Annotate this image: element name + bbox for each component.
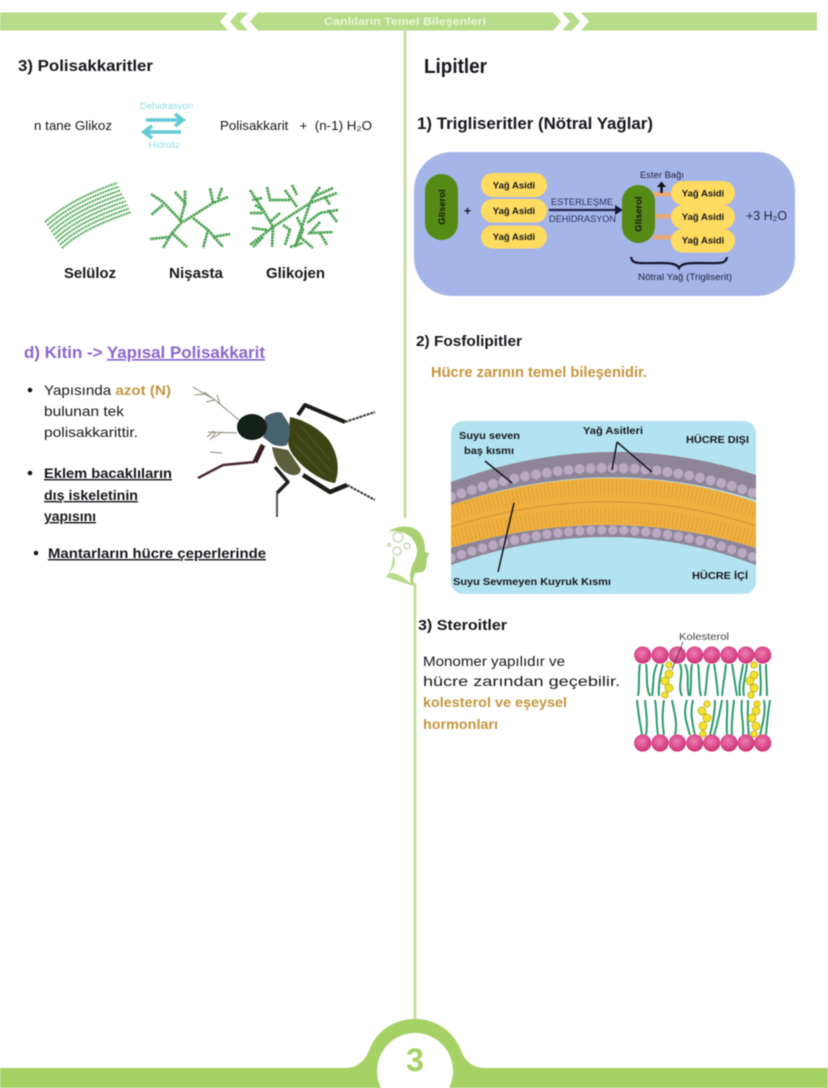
plus sign: +: [464, 204, 471, 218]
header banner: Canlıların Temel Bileşenleri: [324, 16, 486, 28]
gliserol product: Gliserol: [634, 196, 644, 232]
text block: steroitler: Monomer yapılıdır ve: [423, 653, 565, 669]
heading: lipitler: Lipitler: [424, 56, 487, 78]
diagram: nişasta: [150, 188, 230, 282]
diagram: glikojen: Glikojen: [266, 265, 325, 282]
footer bar with page number: [0, 1019, 828, 1088]
reaction: glikoz to polisakkarit: Dehidrasyon: [140, 101, 193, 111]
top phospholipid heads: [634, 646, 771, 664]
yağ asidi reactants: Yağ Asidi: [493, 180, 535, 192]
ester bond label: [640, 170, 684, 193]
membrane labels: Suyu Sevmeyen Kuyruk Kısmı: [453, 576, 611, 588]
gliserol reactant: Gliserol: [437, 189, 448, 225]
text: hücre zarı: Hücre zarının temel bileşenidir.: [431, 365, 647, 381]
membrane labels: HÜCRE DIŞI: [686, 433, 749, 446]
heading: steroitler: 3) Steroitler: [418, 617, 507, 634]
text block: kitin bullets: Mantarların hücre çeperlerinde: [48, 545, 266, 561]
text block: steroitler: [423, 653, 620, 732]
reaction: glikoz to polisakkarit: Polisakkarit + (n-1) H₂O: [220, 118, 372, 133]
diagram: selüloz: [45, 183, 131, 282]
diagram: phospholipid membrane: [451, 421, 756, 594]
ester bond label: Ester Bağı: [640, 170, 684, 180]
membrane labels: Yağ Asitleri: [583, 425, 643, 437]
icon: head silhouette: [386, 526, 429, 586]
diagram: nişasta: Nişasta: [169, 265, 224, 282]
diagram: selüloz: Selüloz: [64, 265, 116, 282]
centre divider lines: [405, 31, 415, 1022]
diagram: cholesterol bilayer: [634, 631, 771, 752]
membrane labels: [453, 425, 749, 588]
illustration: beetle: [193, 387, 375, 517]
heading: polisakkaritler: 3) Polisakkaritler: [18, 58, 153, 75]
yağ asidi products: [671, 181, 735, 252]
text block: kitin bullets: yapısını: [44, 508, 96, 524]
yağ asidi products: Yağ Asidi: [682, 236, 724, 246]
reaction arrow: ESTERLEŞME: [551, 197, 613, 208]
membrane labels: baş kısmı: [464, 445, 514, 457]
text block: kitin bullets: Eklem bacaklıların: [44, 465, 172, 481]
reaction arrow: [549, 197, 623, 225]
lipid tails: [637, 664, 770, 735]
reaction: glikoz to polisakkarit: Hidroliz: [149, 140, 181, 150]
kolesterol label: Kolesterol: [679, 631, 729, 643]
yağ asidi products: Yağ Asidi: [682, 212, 724, 223]
heading: fosfolipitler: 2) Fosfolipitler: [416, 333, 522, 350]
text block: kitin bullets: Yapısında azot (N): [44, 382, 171, 398]
heading: trigliseritler: 1) Trigliseritler (Nötral Yağlar): [417, 115, 653, 133]
text block: kitin bullets: polisakkarittir.: [44, 424, 138, 440]
header banner: [0, 12, 817, 30]
reaction: glikoz to polisakkarit: n tane Glikoz: [34, 118, 112, 133]
yağ asidi reactants: Yağ Asidi: [493, 206, 535, 217]
heading: kitin: d) Kitin -> Yapısal Polisakkarit: [24, 344, 266, 362]
text block: steroitler: kolesterol ve eşeysel: [423, 694, 567, 710]
text block: kitin bullets: bulunan tek: [44, 403, 125, 419]
bottom phospholipid heads: [634, 734, 771, 752]
membrane labels: HÜCRE İÇİ: [692, 569, 748, 582]
ester links: [653, 192, 673, 240]
brace and product label: [631, 257, 732, 282]
gliserol product: [622, 185, 655, 243]
text block: steroitler: hormonları: [423, 716, 498, 732]
gliserol reactant: [425, 174, 458, 240]
yağ asidi reactants: [481, 173, 547, 248]
reaction arrow: DEHİDRASYON: [549, 214, 616, 225]
cholesterol molecules: [661, 662, 760, 737]
reaction: glikoz to polisakkarit: [34, 101, 372, 150]
leader lines: [485, 442, 652, 572]
footer bar with page number: 3: [406, 1042, 424, 1078]
text block: steroitler: hücre zarından geçebilir.: [423, 673, 620, 689]
diagram: glikojen: [250, 185, 338, 282]
membrane labels: Suyu seven: [459, 430, 520, 442]
water product: +3 H₂O: [746, 209, 787, 223]
text block: kitin bullets: [28, 382, 266, 561]
brace and product label: Nötral Yağ (Trigliserit): [638, 272, 732, 282]
yağ asidi reactants: Yağ Asidi: [493, 232, 535, 243]
panel: trigliserit reaction: [414, 152, 795, 296]
text block: kitin bullets: dış iskeletinin: [44, 487, 138, 503]
yağ asidi products: Yağ Asidi: [682, 188, 724, 200]
